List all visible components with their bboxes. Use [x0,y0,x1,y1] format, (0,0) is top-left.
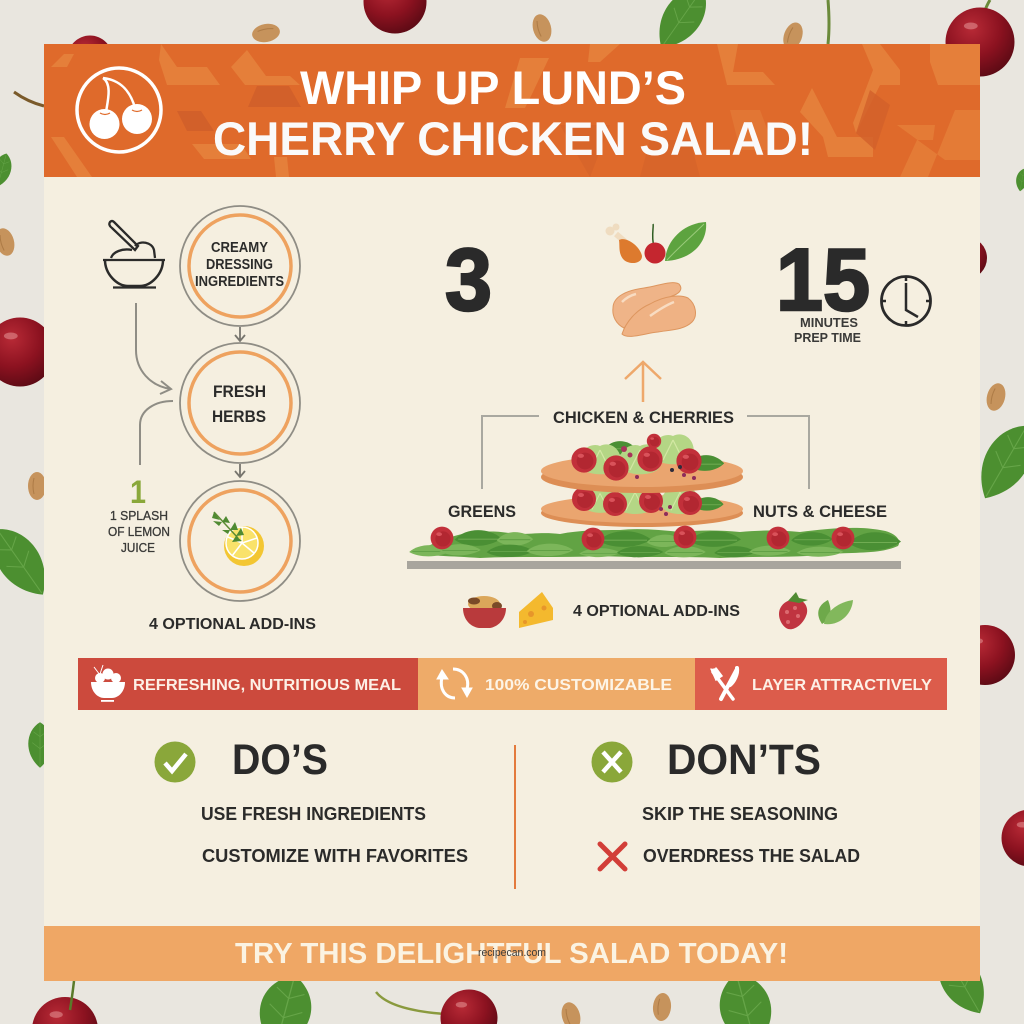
stat: 1 splash of lemon juice: 1 [130,474,146,510]
add-ins row [463,592,853,629]
icon: chicken breasts [613,283,695,336]
step circle: fresh herbs: FRESH [213,382,266,401]
lower salad layer [572,487,724,516]
heading: don'ts: DON’TS [667,736,821,784]
icon: cherries in circle [77,68,161,152]
icon: lemon with herb [212,512,264,566]
icon: nut bowl [463,596,506,628]
icon: mint leaves [818,600,853,624]
footer banner: TRY THIS DELIGHTFUL SALAD TODAY! [235,938,788,970]
icon: green x [592,742,632,782]
step circle: fresh herbs: HERBS [212,407,266,426]
stat: 15 minutes prep time: PREP TIME [794,331,861,345]
stat: 1 splash of lemon juice: OF LEMON [108,525,170,539]
divider [514,745,516,889]
step circle: creamy dressing: CREAMY [211,240,268,256]
stat: 15 minutes prep time: 15 [776,230,870,329]
step circle: creamy dressing [180,206,300,326]
panel: don'ts [592,736,860,869]
don't item 1: SKIP THE SEASONING [642,803,838,824]
stat: 3: 3 [445,230,492,329]
layered salad diagram [407,409,901,569]
label: chicken and cherries: CHICKEN & CHERRIES [553,409,734,427]
arrow: lemon juice to herbs [140,401,173,465]
icon: fork and knife [711,668,737,699]
arrow: up to chicken [625,362,661,402]
benefit: customizable: 100% CUSTOMIZABLE [485,677,672,694]
stat: 1 splash of lemon juice [108,474,170,555]
footer banner [44,926,980,981]
label: greens: GREENS [448,503,516,521]
title: CHERRY CHICKEN SALAD! [213,112,813,165]
step circle: fresh herbs [180,343,300,463]
title [213,61,813,165]
watermark: recipecan.com [478,947,546,959]
benefit: layer attractively [695,658,947,710]
panel: do's [154,736,468,866]
icon: chicken leg, cherry and leaf [606,222,706,264]
label: nuts and cheese: NUTS & CHEESE [753,503,887,521]
step circle: creamy dressing: DRESSING [206,257,273,273]
arrow: bowl to herbs [136,303,171,394]
icon: raspberry [779,592,808,629]
benefit: refreshing [78,658,418,710]
icon: red x [600,844,625,869]
label: optional add-ins left: 4 OPTIONAL ADD-INS [149,616,316,633]
step circle: creamy dressing: INGREDIENTS [195,274,284,290]
upper salad layer [571,434,724,481]
icon: salad bowl [91,665,125,702]
shelf line [407,561,901,569]
stat: 15 minutes prep time: MINUTES [800,316,858,330]
lower plate [541,495,743,527]
benefit strip [78,658,947,710]
header banner [44,44,980,177]
stat: 1 splash of lemon juice: JUICE [121,541,155,555]
icon: cheese [519,592,553,628]
benefit: refreshing: REFRESHING, NUTRITIOUS MEAL [133,677,401,694]
icon: refresh arrows [437,669,472,698]
do item 2: CUSTOMIZE WITH FAVORITES [202,845,468,866]
don't item 2: OVERDRESS THE SALAD [643,845,860,866]
benefit: customizable [418,658,695,710]
label: optional add-ins: 4 OPTIONAL ADD-INS [573,603,740,620]
icon: dressing bowl with spoon [103,221,165,288]
do item 1: USE FRESH INGREDIENTS [201,803,426,824]
greens layer [409,526,901,558]
flow: dressing steps [103,206,316,633]
bracket left [482,416,539,489]
arrow: herbs to lemon [235,464,245,477]
heading: do's: DO’S [232,736,328,784]
icon: green check [154,742,196,782]
upper plate [541,455,743,493]
stat: 1 splash of lemon juice: 1 SPLASH [110,509,168,523]
header geometric pattern [51,44,980,177]
step circle: lemon [180,481,300,601]
benefit: layer attractively: LAYER ATTRACTIVELY [752,677,932,694]
title: WHIP UP LUND’S [300,61,686,114]
icon: clock [881,276,931,326]
arrow: dressing to herbs [235,327,245,341]
bracket right [747,416,809,489]
